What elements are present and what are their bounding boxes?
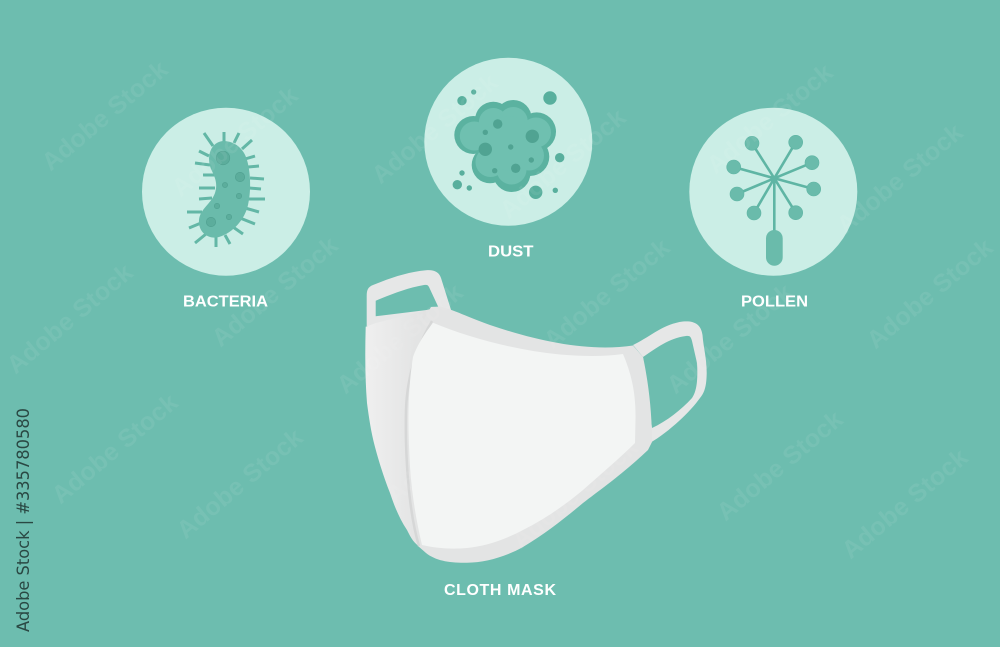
icon circle: dust bbox=[424, 58, 592, 226]
stock id side text: Adobe Stock | #335780580 bbox=[14, 408, 34, 632]
watermarks: Adobe Stock bbox=[366, 68, 503, 189]
panel: pollen bbox=[689, 108, 857, 310]
watermarks: Adobe Stock bbox=[171, 423, 308, 544]
watermarks: Adobe Stock bbox=[861, 233, 998, 354]
watermarks: Adobe Stock bbox=[538, 233, 675, 354]
icon: pollen bbox=[727, 135, 821, 266]
watermarks: Adobe Stock bbox=[206, 231, 343, 352]
watermarks: Adobe Stock bbox=[661, 278, 798, 399]
watermarks: Adobe Stock bbox=[831, 118, 968, 239]
icon circle: bacteria bbox=[142, 108, 310, 276]
watermarks: Adobe Stock bbox=[381, 388, 518, 509]
watermarks: Adobe Stock bbox=[46, 388, 183, 509]
watermarks: Adobe Stock bbox=[701, 58, 838, 179]
icon: bacteria bbox=[187, 132, 265, 247]
label: bacteria: BACTERIA bbox=[183, 294, 268, 310]
watermarks: Adobe Stock bbox=[166, 81, 303, 202]
mask seam bbox=[406, 321, 432, 546]
icon circle: pollen bbox=[689, 108, 857, 276]
mask side panel bbox=[365, 309, 431, 548]
mask border bbox=[407, 306, 652, 563]
watermarks: Adobe Stock bbox=[36, 55, 173, 176]
label: cloth mask: CLOTH MASK bbox=[444, 582, 556, 599]
watermarks bbox=[1, 55, 998, 564]
watermarks: Adobe Stock bbox=[1, 258, 138, 379]
watermarks: Adobe Stock bbox=[506, 433, 643, 554]
watermarks: Adobe Stock bbox=[494, 103, 631, 224]
watermarks: Adobe Stock bbox=[711, 405, 848, 526]
illustration: cloth mask bbox=[365, 270, 707, 599]
panel: bacteria bbox=[142, 108, 310, 310]
right ear strap bbox=[633, 321, 707, 443]
watermarks: Adobe Stock bbox=[836, 443, 973, 564]
watermarks: Adobe Stock bbox=[331, 278, 468, 399]
icon: dust bbox=[453, 89, 564, 199]
mask front panel bbox=[408, 323, 636, 549]
left ear strap bbox=[367, 270, 452, 326]
label: dust: DUST bbox=[488, 244, 534, 260]
label: pollen: POLLEN bbox=[741, 294, 808, 310]
panel: dust bbox=[424, 58, 592, 260]
